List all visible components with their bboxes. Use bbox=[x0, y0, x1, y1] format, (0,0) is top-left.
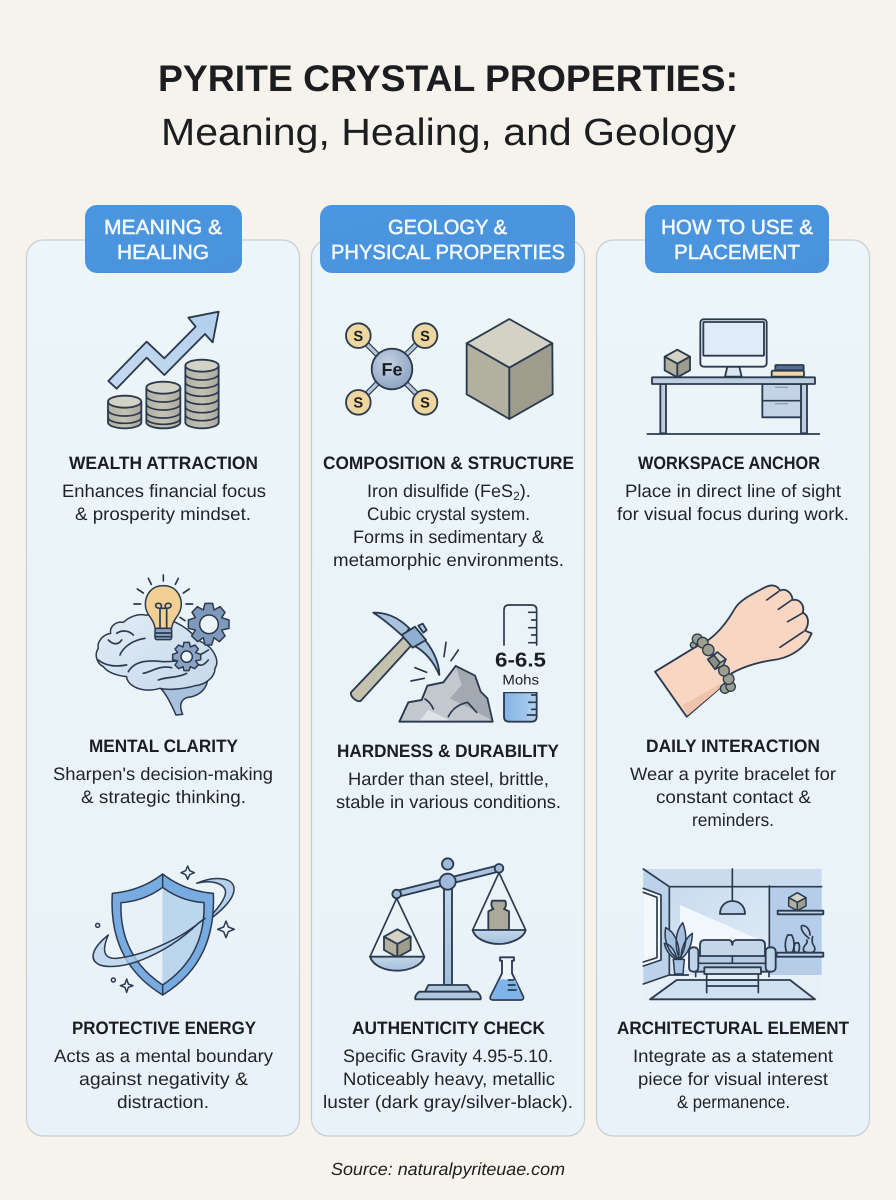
text block: composition and structure bbox=[323, 453, 574, 570]
text block: composition and structure: ). bbox=[520, 481, 531, 501]
icon: desk with monitor and cube bbox=[647, 319, 819, 434]
heading badge: how to use and placement bbox=[645, 205, 829, 273]
icon: living room interior bbox=[643, 869, 823, 1002]
text block: wealth attraction: Enhances financial focus bbox=[62, 481, 266, 501]
title bbox=[158, 58, 738, 154]
text block: hardness and durability: HARDNESS & DURABILITY bbox=[337, 741, 559, 761]
text block: protective energy: against negativity & bbox=[79, 1069, 248, 1089]
icon: FeS2 molecule and cube: S bbox=[420, 395, 430, 411]
text block: mental clarity bbox=[53, 736, 273, 807]
text block: composition and structure: 2 bbox=[513, 489, 520, 503]
text block: daily interaction bbox=[630, 736, 836, 830]
icon: FeS2 molecule and cube: S bbox=[420, 328, 430, 344]
text block: authenticity check: Noticeably heavy, metallic bbox=[343, 1069, 555, 1089]
text block: architectural element: piece for visual interest bbox=[638, 1069, 828, 1089]
text block: wealth attraction: WEALTH ATTRACTION bbox=[69, 453, 258, 473]
text block: mental clarity: Sharpen's decision-making bbox=[53, 764, 273, 784]
text block: protective energy bbox=[54, 1018, 273, 1112]
text block: mental clarity: & strategic thinking. bbox=[81, 787, 246, 807]
icon: FeS2 molecule and cube: Fe bbox=[381, 359, 403, 379]
heading badge: geology and physical properties bbox=[320, 205, 575, 273]
text block: workspace anchor: for visual focus during work. bbox=[617, 504, 849, 524]
panel: meaning and healing bbox=[26, 205, 300, 1136]
icon: rising arrow and coin stacks bbox=[108, 312, 219, 428]
icon: shield with orbit bbox=[93, 866, 234, 995]
text block: architectural element: Integrate as a statement bbox=[633, 1046, 833, 1066]
text block: architectural element: ARCHITECTURAL ELEMENT bbox=[617, 1018, 849, 1038]
text block: authenticity check: luster (dark gray/silver-black). bbox=[323, 1092, 573, 1112]
text block: authenticity check: Specific Gravity 4.95-5.10. bbox=[343, 1046, 553, 1066]
text block: composition and structure: Cubic crystal system. bbox=[367, 504, 530, 524]
heading badge: geology and physical properties: PHYSICAL PROPERTIES bbox=[331, 241, 565, 264]
text block: authenticity check: AUTHENTICITY CHECK bbox=[352, 1018, 545, 1038]
source line: Source: naturalpyriteuae.com bbox=[331, 1159, 565, 1179]
text block: workspace anchor bbox=[617, 453, 849, 524]
text block: composition and structure: Forms in sedimentary & bbox=[353, 527, 544, 547]
icon: FeS2 molecule and cube: S bbox=[353, 328, 363, 344]
text block: authenticity check bbox=[323, 1018, 573, 1112]
text block: workspace anchor: Place in direct line of sight bbox=[625, 481, 841, 501]
text block: composition and structure: COMPOSITION & STRUCTURE bbox=[323, 453, 574, 473]
text block: protective energy: Acts as a mental boundary bbox=[54, 1046, 273, 1066]
text block: hardness and durability: Harder than steel, brittle, bbox=[348, 769, 549, 789]
text block: daily interaction: DAILY INTERACTION bbox=[646, 736, 820, 756]
icon: brain, light bulb and gears bbox=[96, 575, 229, 715]
icon: pickaxe, rock and Mohs gauge bbox=[351, 605, 546, 722]
text block: protective energy: PROTECTIVE ENERGY bbox=[72, 1018, 256, 1038]
title: Meaning, Healing, and Geology bbox=[161, 112, 736, 154]
icon: pickaxe, rock and Mohs gauge: 6-6.5 bbox=[495, 649, 546, 671]
text block: hardness and durability bbox=[336, 741, 561, 812]
text block: wealth attraction: & prosperity mindset. bbox=[75, 504, 251, 524]
text block: composition and structure: Iron disulfide (FeS bbox=[367, 481, 513, 501]
heading badge: meaning and healing bbox=[85, 205, 242, 273]
text block: protective energy: distraction. bbox=[117, 1092, 209, 1112]
heading badge: meaning and healing: MEANING & bbox=[104, 216, 222, 239]
text block: hardness and durability: stable in various conditions. bbox=[336, 792, 561, 812]
text block: workspace anchor: WORKSPACE ANCHOR bbox=[638, 453, 820, 473]
text block: daily interaction: constant contact & bbox=[656, 787, 811, 807]
panel: geology and physical properties bbox=[312, 205, 584, 1136]
heading badge: how to use and placement: HOW TO USE & bbox=[661, 216, 813, 239]
text block: composition and structure: metamorphic environments. bbox=[333, 550, 564, 570]
text block: daily interaction: Wear a pyrite bracelet for bbox=[630, 764, 836, 784]
text block: architectural element: & permanence. bbox=[677, 1092, 790, 1112]
heading badge: geology and physical properties: GEOLOGY & bbox=[388, 216, 507, 239]
text block: daily interaction: reminders. bbox=[692, 810, 774, 830]
heading badge: how to use and placement: PLACEMENT bbox=[674, 241, 800, 264]
icon: balance scale and flask bbox=[370, 858, 526, 1000]
text block: wealth attraction bbox=[62, 453, 266, 524]
panel: how to use and placement bbox=[596, 205, 870, 1136]
icon: pickaxe, rock and Mohs gauge: Mohs bbox=[502, 672, 539, 687]
title: PYRITE CRYSTAL PROPERTIES: bbox=[158, 58, 738, 99]
text block: architectural element bbox=[617, 1018, 849, 1112]
icon: wrist with pyrite bracelet bbox=[655, 585, 812, 717]
text block: mental clarity: MENTAL CLARITY bbox=[89, 736, 238, 756]
icon: FeS2 molecule and cube bbox=[346, 319, 553, 419]
heading badge: meaning and healing: HEALING bbox=[117, 241, 209, 264]
icon: FeS2 molecule and cube: S bbox=[353, 395, 363, 411]
